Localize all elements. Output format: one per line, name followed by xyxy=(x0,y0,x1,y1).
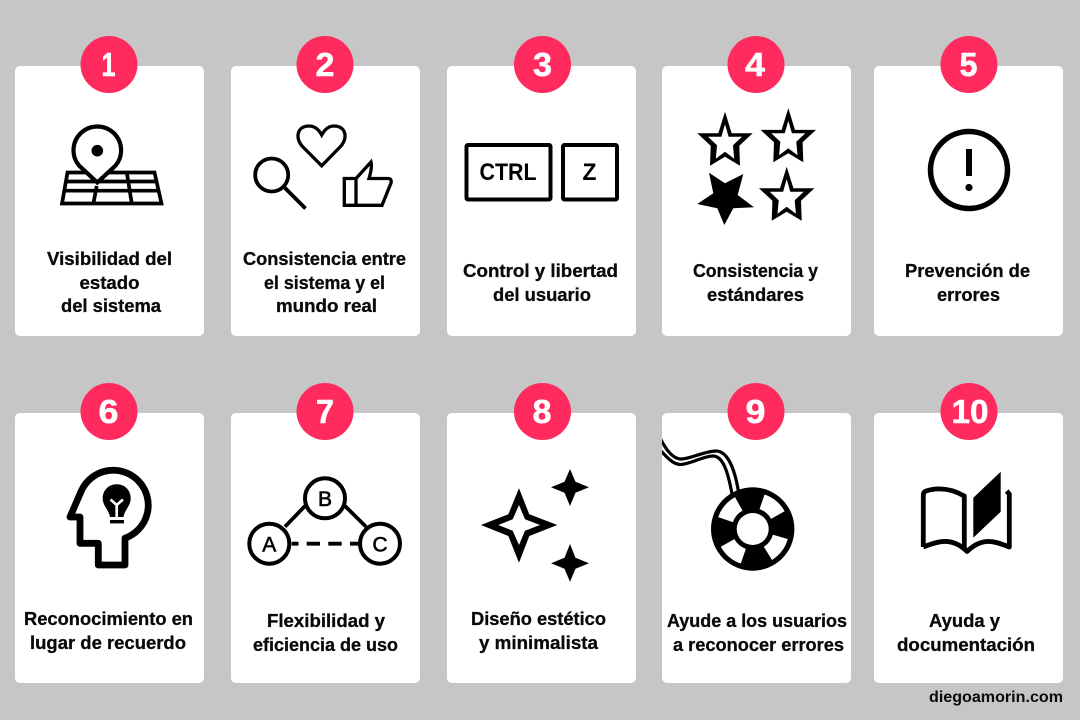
number badge 4: 4 xyxy=(745,46,766,83)
label 3: del usuario xyxy=(493,285,591,305)
icon: lifebuoy with rope xyxy=(660,438,794,571)
label 9: a reconocer errores xyxy=(673,635,844,655)
number badge 10 xyxy=(940,383,998,440)
label 10: documentación xyxy=(897,635,1035,655)
panel: card 8 xyxy=(447,383,636,683)
card background 9 xyxy=(662,413,851,683)
card background 8 xyxy=(447,413,636,683)
panel: card 10 xyxy=(874,383,1063,683)
icon: A B C nodes xyxy=(249,478,400,564)
panel: card 4 xyxy=(662,36,851,336)
label 8: Diseño estético xyxy=(471,609,606,629)
label 8: y minimalista xyxy=(479,633,599,653)
card background 5 xyxy=(874,66,1063,336)
icon: exclamation in circle xyxy=(930,132,1008,208)
label 6 xyxy=(24,609,193,653)
icon: open book xyxy=(923,472,1009,552)
label 2: el sistema y el xyxy=(264,273,385,293)
number badge 1: 1 xyxy=(102,46,116,83)
card background 4 xyxy=(662,66,851,336)
icon: A B C nodes: A xyxy=(262,534,276,556)
number badge 5: 5 xyxy=(960,46,978,83)
label 2 xyxy=(243,249,406,316)
number badge 10: 10 xyxy=(952,393,988,430)
label 7: Flexibilidad y xyxy=(267,611,385,631)
number badge 1 xyxy=(80,36,138,93)
label 10: Ayuda y xyxy=(929,611,1000,631)
number badge 3 xyxy=(514,36,571,93)
number badge 6 xyxy=(80,383,138,440)
icon: head with light bulb xyxy=(70,470,148,565)
card background 6 xyxy=(15,413,204,683)
label 5: errores xyxy=(937,285,1000,305)
number badge 8: 8 xyxy=(532,393,552,430)
number badge 2: 2 xyxy=(316,46,334,83)
label 1: Visibilidad del xyxy=(47,249,172,269)
label 6: Reconocimiento en xyxy=(24,609,193,629)
card background 3 xyxy=(447,66,636,336)
label 4 xyxy=(693,261,818,305)
number badge 6: 6 xyxy=(98,393,118,430)
icon: A B C nodes: C xyxy=(372,534,388,556)
label 9 xyxy=(667,611,847,655)
panel: card 3 xyxy=(447,36,636,336)
card background 1 xyxy=(15,66,204,336)
number badge 7 xyxy=(296,383,354,440)
label 10 xyxy=(897,611,1035,655)
icon: four stars xyxy=(697,108,816,225)
number badge 2 xyxy=(296,36,354,93)
icon: heart, magnifier and thumbs up xyxy=(255,126,391,208)
card background 10 xyxy=(874,413,1063,683)
icon: CTRL Z keys: Z xyxy=(582,159,596,186)
icon: sparkles xyxy=(481,469,589,582)
number badge 9 xyxy=(728,383,784,440)
number badge 8 xyxy=(514,383,571,440)
number badge 3: 3 xyxy=(533,46,552,83)
label 6: lugar de recuerdo xyxy=(30,633,186,653)
card background 2 xyxy=(231,66,420,336)
panel: card 2 xyxy=(231,36,420,336)
label 7: eficiencia de uso xyxy=(253,635,398,655)
label 1: estado xyxy=(80,273,140,293)
label 3: Control y libertad xyxy=(463,261,618,281)
label 4: Consistencia y xyxy=(693,261,818,281)
label 5 xyxy=(905,261,1030,305)
label 5: Prevención de xyxy=(905,261,1030,281)
label 2: Consistencia entre xyxy=(243,249,406,269)
number badge 9: 9 xyxy=(746,393,766,430)
label 3 xyxy=(463,261,618,305)
icon: A B C nodes: B xyxy=(318,488,332,511)
label 9: Ayude a los usuarios xyxy=(667,611,847,631)
icon: map with location pin xyxy=(62,126,162,204)
label 2: mundo real xyxy=(276,296,377,316)
number badge 5 xyxy=(940,36,998,93)
panel: card 9 xyxy=(660,383,851,683)
number badge 4 xyxy=(728,36,784,93)
panel: card 7 xyxy=(231,383,420,683)
icon: CTRL Z keys xyxy=(466,145,617,200)
panel: card 6 xyxy=(15,383,204,683)
label 1 xyxy=(47,249,172,316)
panel: card 5 xyxy=(874,36,1063,336)
panel: card 1 xyxy=(15,36,204,336)
label 1: del sistema xyxy=(61,296,162,316)
number badge 7: 7 xyxy=(316,393,334,430)
footer credit: diegoamorin.com xyxy=(929,689,1063,706)
icon: CTRL Z keys: CTRL xyxy=(480,159,536,186)
label 7 xyxy=(253,611,398,655)
label 8 xyxy=(471,609,606,653)
label 4: estándares xyxy=(707,285,804,305)
card background 7 xyxy=(231,413,420,683)
